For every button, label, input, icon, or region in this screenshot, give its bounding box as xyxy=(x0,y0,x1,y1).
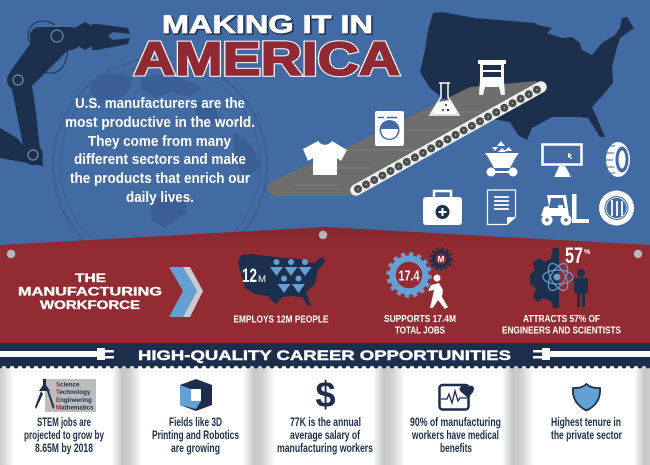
text: salary: average salary of xyxy=(290,428,361,442)
power cord left xyxy=(0,348,114,360)
robot arm xyxy=(0,21,130,166)
stat: attracts 57%: ATTRACTS 57% OF xyxy=(523,314,600,325)
text: medical benefits xyxy=(410,415,501,455)
intro text: U.S. manufacturers are the xyxy=(75,96,245,112)
text: tenure xyxy=(551,415,622,442)
stat: employs 12M: EMPLOYS 12M PEOPLE xyxy=(234,314,329,326)
stat: attracts 57%: 57 xyxy=(565,243,583,268)
usa map xyxy=(420,12,634,140)
title xyxy=(134,11,400,85)
stat: supports 17.4M: TOTAL JOBS xyxy=(395,326,445,336)
icon: nightstand xyxy=(478,60,506,95)
stat: supports 17.4M: SUPPORTS 17.4M xyxy=(384,314,456,325)
icon: mine cart xyxy=(485,141,519,176)
icon: document xyxy=(488,190,516,224)
panel: manufacturing workforce xyxy=(0,227,650,343)
conveyor belt xyxy=(268,81,542,196)
intro text xyxy=(65,96,255,206)
title: MAKING IT IN xyxy=(163,12,374,40)
chevron arrow xyxy=(169,267,203,317)
text: STEM jobs xyxy=(24,415,104,455)
text: fields: Fields like 3D xyxy=(169,415,222,429)
title: AMERICA xyxy=(134,32,400,85)
stat: supports 17.4M: 17.4 xyxy=(398,268,420,284)
intro text: the products that enrich our xyxy=(70,171,250,187)
stat: employs 12M: M xyxy=(258,274,266,284)
bolt xyxy=(319,231,327,239)
text: fields xyxy=(152,415,239,455)
icon: STEM box: Mathematics xyxy=(56,404,94,412)
text: STEM jobs: projected to grow by xyxy=(24,428,104,442)
icon: medical kit xyxy=(423,191,462,225)
stat: supports 17.4M: M xyxy=(438,255,445,264)
intro text: most productive in the world. xyxy=(65,115,255,131)
text: medical benefits: benefits xyxy=(440,441,472,455)
icon: STEM box: Engineering xyxy=(56,397,92,404)
career heading: HIGH-QUALITY CAREER OPPORTUNITIES xyxy=(138,347,511,363)
stat: attracts 57%: ENGINEERS AND SCIENTISTS xyxy=(502,326,621,336)
title: MAKING IT IN xyxy=(162,11,373,39)
icon: STEM box xyxy=(35,379,96,412)
text: STEM jobs: STEM jobs are xyxy=(37,415,91,429)
workforce heading: MANUFACTURING xyxy=(18,286,162,298)
text: medical benefits: workers have medical xyxy=(411,428,499,442)
text: fields: are growing xyxy=(171,441,220,455)
icon: dollar sign: $ xyxy=(315,374,336,415)
intro text: different sectors and make xyxy=(74,152,246,168)
bolt xyxy=(7,250,15,258)
icon: forklift xyxy=(541,194,589,226)
bolt xyxy=(634,250,642,258)
globe watermark xyxy=(53,58,267,272)
icon: heart monitor xyxy=(440,385,474,410)
icon: tire xyxy=(606,142,630,177)
stat: employs 12M: 12 xyxy=(242,266,257,287)
icon: computer monitor xyxy=(542,144,582,177)
text: salary: 77K is the annual xyxy=(290,415,361,429)
workforce heading: THE xyxy=(75,273,106,285)
stat: attracts 57% xyxy=(502,243,621,336)
workforce heading xyxy=(18,273,162,312)
text: salary xyxy=(277,415,373,455)
icon: t-shirt xyxy=(303,141,347,175)
icon: flask xyxy=(430,83,459,115)
text: STEM jobs: 8.65M by 2018 xyxy=(35,441,93,455)
icon: washing machine xyxy=(375,111,404,146)
text: medical benefits: 90% of manufacturing xyxy=(410,415,501,429)
intro text: They come from many xyxy=(88,134,231,150)
intro text: daily lives. xyxy=(126,190,194,206)
icon: dinner plate xyxy=(599,190,634,226)
icon: STEM box: Technology xyxy=(56,389,91,396)
icon: shield xyxy=(573,384,600,410)
icon: 3D cube xyxy=(180,379,212,411)
power cord right xyxy=(533,348,650,360)
stat: supports 17.4M xyxy=(384,248,456,336)
panel: career opportunities xyxy=(0,343,650,465)
text: tenure: the private sector xyxy=(551,428,622,442)
text: fields: Printing and Robotics xyxy=(152,428,239,442)
stat: employs 12M xyxy=(234,254,329,326)
text: tenure: Highest tenure in xyxy=(551,415,621,429)
icon: STEM box: Science xyxy=(56,382,80,388)
text: salary: manufacturing workers xyxy=(277,441,373,455)
workforce heading: WORKFORCE xyxy=(40,300,140,312)
stat: attracts 57%: % xyxy=(584,249,591,256)
title: AMERICA xyxy=(134,32,400,85)
